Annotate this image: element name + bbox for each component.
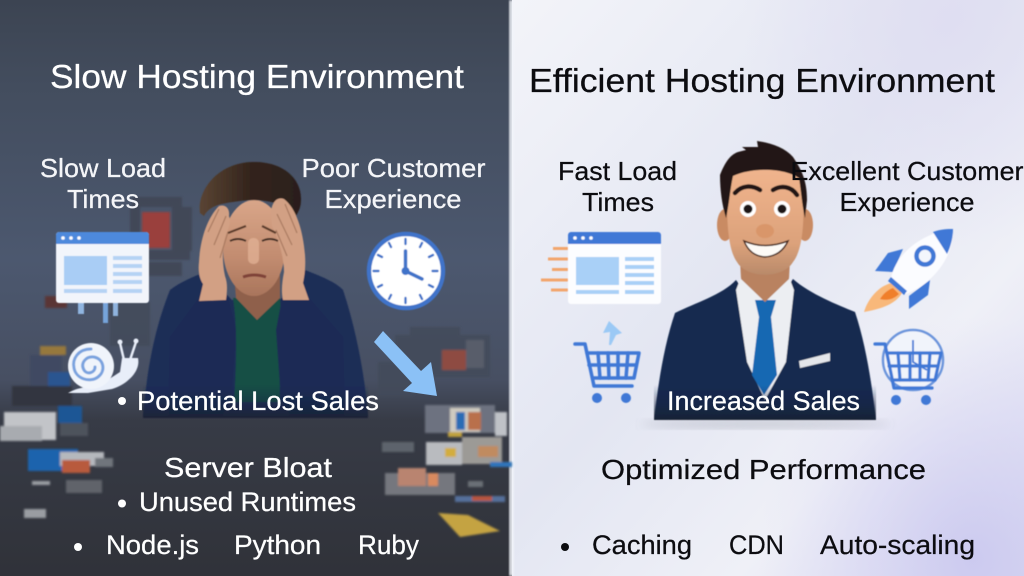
panel: slow hosting environment background [0, 0, 512, 576]
label: excellent customer experience: Excellent Customer [790, 156, 1024, 186]
list: runtimes: Python [234, 530, 321, 560]
heading: optimized performance: Optimized Performance [601, 454, 926, 485]
label: fast load times: Fast Load [558, 156, 677, 186]
face [223, 200, 285, 296]
icon: snail [68, 338, 138, 393]
list: performance features: Auto-scaling [820, 530, 975, 560]
list: runtimes [74, 530, 419, 560]
label: fast load times: Times [582, 187, 654, 217]
label: increased sales: Increased Sales [667, 386, 860, 416]
right hand [271, 198, 309, 300]
suit [654, 279, 876, 420]
icon: rocket [864, 229, 953, 312]
person: happy man [640, 141, 890, 429]
list: performance features [561, 530, 975, 560]
pocket square [799, 353, 830, 368]
title: slow hosting environment: Slow Hosting Environment [50, 58, 464, 95]
hair [200, 162, 301, 216]
green shirt [233, 296, 281, 402]
bottom fade [143, 385, 368, 418]
neck [740, 260, 790, 302]
hair [720, 141, 807, 218]
panel: efficient hosting environment background [512, 0, 1024, 576]
right sleeve [276, 298, 345, 418]
pixel debris: left panel [0, 197, 512, 537]
nose [756, 224, 774, 238]
list: runtimes: Node.js [106, 530, 199, 560]
label: poor customer experience: Poor Customer [302, 153, 486, 183]
icon: clock [369, 234, 443, 308]
tie [752, 300, 777, 395]
icon: shopping cart with clock [875, 330, 943, 405]
shirt [736, 277, 794, 400]
title: efficient hosting environment: Efficient Hosting Environment [529, 62, 995, 99]
label: poor customer experience: Experience [324, 184, 462, 214]
icon: shopping cart with up arrow [575, 321, 639, 403]
jacket [143, 270, 368, 418]
bottom fade [654, 385, 876, 420]
brows [735, 187, 797, 195]
eyes [740, 201, 756, 217]
heading: server bloat: Server Bloat [164, 452, 332, 483]
bullet: potential lost sales: Potential Lost Sales [137, 386, 379, 416]
icon: fast browser window [541, 232, 661, 304]
ears [717, 209, 733, 241]
face [727, 170, 803, 275]
left sleeve [168, 298, 236, 418]
neck [234, 275, 280, 320]
brows eyes mouth [228, 226, 276, 233]
arrow: sales decline [374, 331, 437, 396]
list: performance features: Caching [592, 530, 692, 560]
list: runtimes: Ruby [358, 530, 419, 560]
person: stressed man [143, 162, 368, 418]
left hand [199, 206, 230, 301]
list: performance features: CDN [729, 530, 784, 560]
label: slow load times: Slow Load [40, 153, 166, 183]
smile [744, 241, 788, 257]
label: excellent customer experience: Experience [840, 187, 974, 217]
icon: browser window melting [56, 232, 149, 323]
bullet: unused runtimes: Unused Runtimes [139, 487, 356, 517]
label: slow load times: Times [67, 184, 139, 214]
